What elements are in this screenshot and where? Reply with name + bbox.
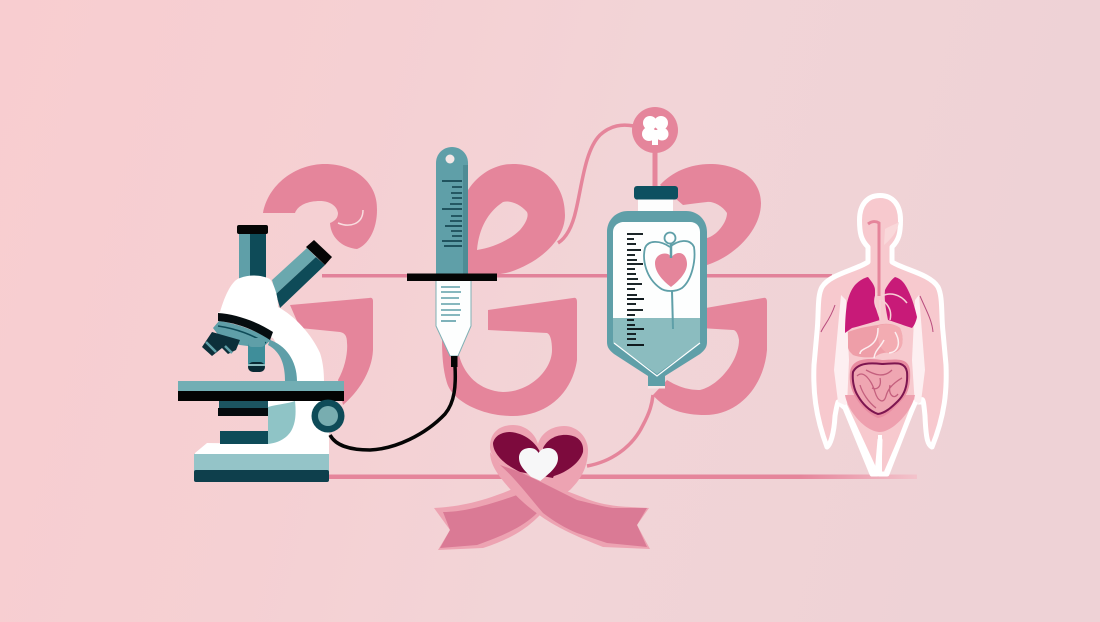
icon: microscope: [178, 225, 344, 482]
clover connector curve: [558, 125, 634, 243]
angled tube: [272, 240, 332, 308]
icon: clover badge: [632, 107, 678, 153]
white heart: [519, 448, 558, 483]
microscope body: [195, 275, 329, 455]
syringe scale ticks: [442, 181, 462, 246]
bag shell: [607, 211, 707, 386]
gaps between arms and torso: [834, 295, 925, 406]
heart interior: [493, 432, 556, 478]
base: [194, 454, 329, 471]
icon: IV bag: [607, 186, 707, 388]
liver and stomach: [848, 324, 903, 357]
left ribbon tail: [434, 488, 540, 550]
body silhouette: [814, 196, 946, 474]
heart loop: [490, 425, 588, 510]
decorative large letterforms: [263, 164, 767, 416]
syringe barrel: [436, 280, 471, 356]
intestines: [850, 359, 910, 418]
syringe crossbar: [407, 274, 497, 281]
liquid: [613, 318, 700, 374]
icon: awareness ribbon: [434, 425, 650, 550]
ribbon-to-bag curve: [587, 395, 653, 466]
arm veins: [821, 296, 933, 332]
right ribbon tail: [490, 452, 650, 549]
under-stage blocks: [218, 401, 296, 444]
cable: [330, 366, 455, 450]
icon: human body: [814, 196, 946, 474]
bag scale ticks: [627, 234, 644, 345]
nosepiece: [202, 313, 273, 372]
curved arm: [268, 340, 297, 381]
lungs: [845, 277, 880, 333]
stage: [178, 381, 344, 392]
heart motif: [644, 232, 694, 329]
icon: syringe: [407, 147, 497, 367]
leg separators: [845, 402, 916, 474]
clover stem: [652, 150, 658, 188]
pelvis: [845, 395, 915, 432]
connector lines: [322, 274, 917, 479]
barrel markings: [441, 287, 461, 321]
trachea: [868, 222, 879, 296]
focus knob: [312, 400, 344, 432]
syringe connector: [451, 356, 458, 367]
eyepiece tube: [237, 225, 268, 282]
